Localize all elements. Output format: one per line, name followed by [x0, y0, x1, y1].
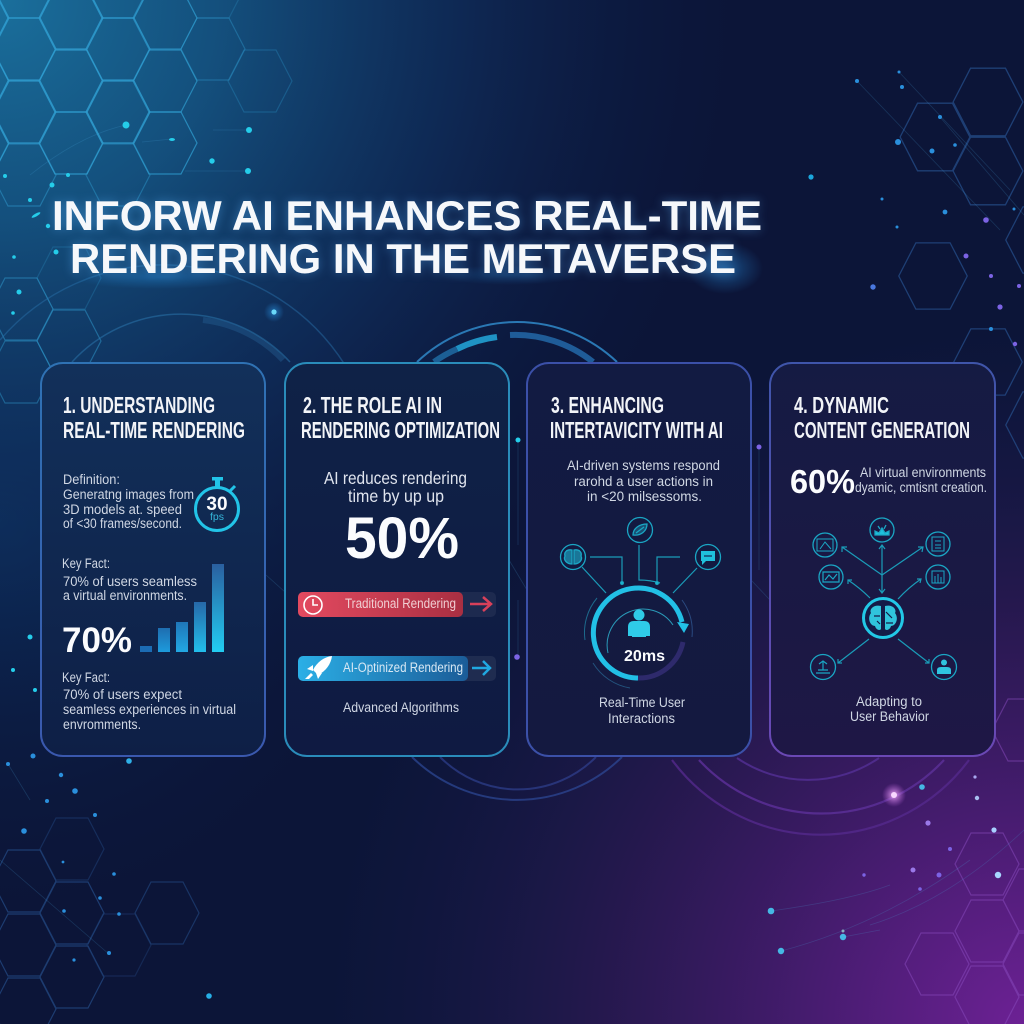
hexagon pattern: top right [899, 68, 1024, 458]
connector lines [582, 545, 697, 593]
panel 3 body text: AI-driven systems respond [567, 458, 720, 473]
icon: clock [304, 596, 322, 614]
panel 4 heading: 4. DYNAMIC [794, 392, 889, 418]
icon: stopwatch 30 fps: fps [210, 511, 224, 523]
definition text: 3D models at. speed [63, 502, 182, 517]
definition text: Definition: [63, 472, 120, 487]
panel 4 body text: dyamic, cmtisnt creation. [855, 480, 987, 495]
AI-optimized rendering bar: AI-Optinized Rendering [343, 660, 463, 675]
panel 2 intro text: AI reduces rendering [324, 468, 467, 488]
icon: stopwatch 30 fps [196, 477, 238, 530]
icon: leaf [628, 518, 652, 542]
key fact 1 text: Key Fact: [62, 556, 110, 571]
key fact 2 text: 70% of users expect [63, 687, 182, 702]
title: INFORW AI ENHANCES REAL-TIME [52, 192, 762, 239]
key fact 2 text: seamless experiences in virtual [63, 702, 236, 717]
icon: top node [870, 518, 894, 542]
hexagon pattern: bottom right [905, 699, 1024, 1024]
panel 2: the role of AI in rendering optimization [285, 363, 509, 756]
icon: brain [560, 544, 586, 570]
panel 3 body text: rarohd a user actions in [574, 474, 713, 489]
panel 4 body text [855, 465, 987, 495]
arrows from central brain [838, 545, 929, 663]
panel 2 heading: 2. THE ROLE AI IN [303, 392, 442, 418]
key fact 1 text: 70% of users seamless [63, 574, 197, 589]
panel 3 caption: Interactions [608, 711, 675, 726]
panel 2 intro text: time by up up [348, 486, 444, 506]
panel 3 caption: Real-Time User [599, 695, 685, 710]
panel 3: enhancing interactivity with AI [527, 363, 751, 756]
panel 1: understanding real-time rendering [41, 363, 265, 756]
arrow: red [470, 597, 491, 611]
panel 3 heading [550, 392, 723, 443]
bar chart [140, 564, 224, 652]
panel 4 body text: AI virtual environments [860, 465, 986, 480]
AI-optimized rendering bar [298, 656, 496, 681]
key fact 1 text [62, 556, 197, 603]
key fact 2 text: Key Fact: [62, 670, 110, 685]
definition text: of <30 frames/second. [63, 516, 182, 531]
panel 3 body text [567, 458, 720, 504]
panel 1 heading [63, 392, 245, 443]
icon: user [628, 610, 650, 637]
advanced algorithms caption: Advanced Algorithms [343, 700, 459, 715]
icon: image node [813, 533, 837, 557]
definition text: Generatng images from [63, 487, 194, 502]
icon: document node [926, 532, 950, 556]
60% statistic: 60% [790, 463, 855, 500]
ring timer 20ms: 20ms [624, 648, 665, 665]
icon: map node [819, 565, 843, 589]
key fact 1 text: a virtual environments. [63, 588, 187, 603]
title: RENDERING IN THE METAVERSE [70, 235, 736, 282]
panel 1 heading: 1. UNDERSTANDING [63, 392, 215, 418]
panel 4 caption [850, 694, 929, 724]
arrow: blue [472, 661, 490, 675]
concentric arcs behind the panels [0, 265, 969, 835]
key fact 2 text: envromments. [63, 717, 141, 732]
icon: user node [932, 654, 956, 680]
title glow [70, 242, 763, 294]
panel 3 caption [599, 695, 685, 726]
panel 2 heading [301, 392, 500, 443]
icon: building node [926, 565, 950, 589]
panel 1 heading: REAL-TIME RENDERING [63, 417, 245, 443]
50% statistic: 50% [345, 506, 459, 571]
panel 2 heading: RENDERING OPTIMIZATION [301, 417, 500, 443]
icon: landscape node [810, 654, 836, 680]
70% statistic: 70% [62, 621, 132, 660]
panel 2 intro text [324, 468, 467, 506]
panel 4: dynamic content generation [770, 363, 995, 756]
panel 3 heading: 3. ENHANCING [551, 392, 664, 418]
hexagon pattern: bottom left [0, 818, 199, 1024]
definition text [63, 472, 194, 531]
traditional rendering bar: Traditional Rendering [345, 596, 456, 611]
panel 4 heading [794, 392, 970, 443]
panel 4 caption: User Behavior [850, 709, 929, 724]
panel 4 caption: Adapting to [856, 694, 922, 709]
icon: central brain [864, 598, 902, 638]
panel 3 body text: in <20 milsessoms. [587, 489, 702, 504]
icon: rocket [305, 656, 332, 679]
title [52, 192, 762, 282]
panel 3 heading: INTERTAVICITY WITH AI [550, 417, 723, 443]
key fact 2 text [62, 670, 236, 732]
icon: stopwatch 30 fps: 30 [206, 494, 228, 515]
traditional rendering bar [298, 592, 496, 617]
ring timer 20ms [584, 588, 692, 688]
hexagon pattern: top left [0, 0, 292, 403]
icon: chat bubble [696, 544, 720, 570]
